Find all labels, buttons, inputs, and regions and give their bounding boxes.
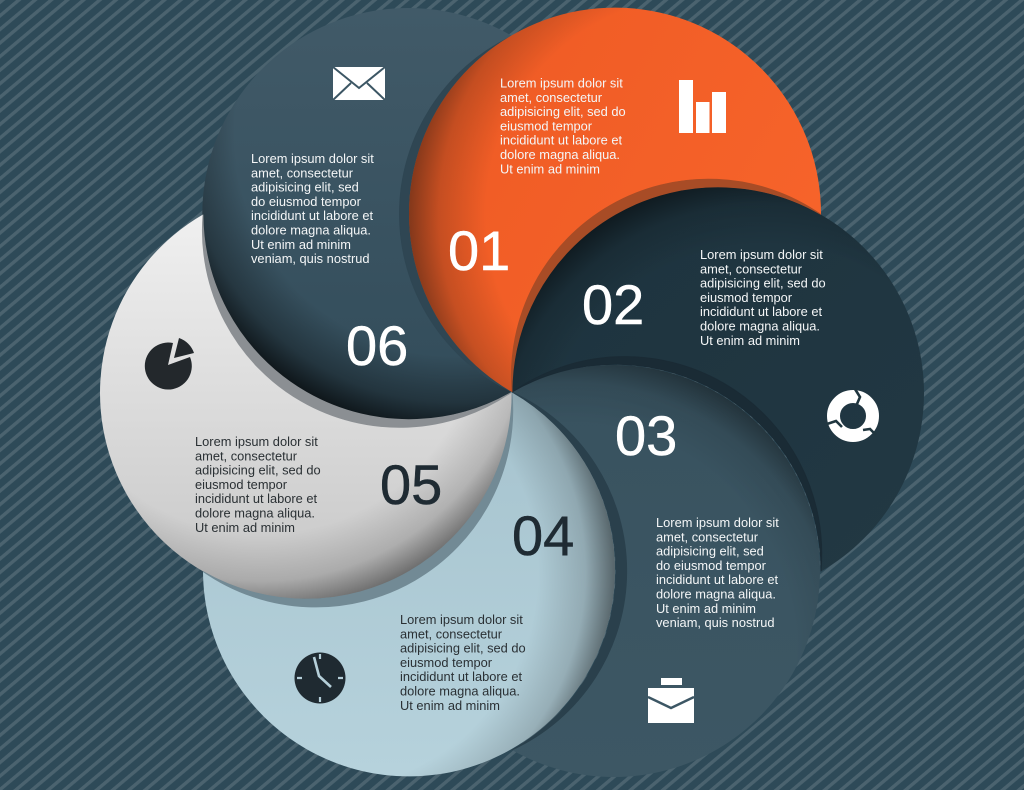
text block 04: adipisicing elit, sed do [400, 641, 526, 656]
text block 05: eiusmod tempor [195, 477, 288, 492]
text block 04: incididunt ut labore et [400, 669, 523, 684]
text block 05: Lorem ipsum dolor sit [195, 434, 318, 449]
text block 02: eiusmod tempor [700, 290, 793, 305]
number 05: 05 [380, 453, 442, 516]
text block 05: adipisicing elit, sed do [195, 463, 321, 478]
text block 04: Ut enim ad minim [400, 698, 500, 713]
text block 02: Lorem ipsum dolor sit [700, 247, 823, 262]
text block 04: dolore magna aliqua. [400, 684, 520, 698]
text block 03: incididunt ut labore et [656, 572, 779, 587]
text block 03: adipisicing elit, sed [656, 544, 764, 559]
panel: 06 [202, 8, 512, 420]
text block 05: Ut enim ad minim [195, 520, 295, 535]
text block 06: veniam, quis nostrud [251, 251, 370, 266]
text block 01: Lorem ipsum dolor sit [500, 76, 623, 90]
number 03: 03 [615, 404, 677, 467]
text block 04: eiusmod tempor [400, 655, 493, 670]
icon: bar chart [679, 80, 726, 133]
number 01: 01 [448, 219, 510, 282]
icon: cycle arrows [827, 389, 876, 436]
text block 04: amet, consectetur [400, 626, 503, 641]
number 04: 04 [512, 504, 574, 567]
text block 06: incididunt ut labore et [251, 208, 374, 223]
text block 03: amet, consectetur [656, 529, 759, 544]
text block 06: dolore magna aliqua. [251, 222, 371, 238]
text block 06: do eiusmod tempor [251, 194, 362, 209]
text block 05: amet, consectetur [195, 448, 298, 463]
text block 03: do eiusmod tempor [656, 558, 767, 573]
icon: pie chart [145, 338, 194, 390]
text block 02: dolore magna aliqua. [700, 318, 820, 334]
text block 04: Lorem ipsum dolor sit [400, 612, 523, 627]
panel: 01 [409, 8, 821, 392]
text block 01: eiusmod tempor [500, 118, 593, 133]
text block 05: incididunt ut labore et [195, 491, 318, 506]
panel: 02 [512, 187, 924, 571]
panel: 03 [512, 365, 820, 777]
icon: clock [294, 652, 346, 704]
number 02: 02 [582, 273, 644, 336]
text block 02: adipisicing elit, sed do [700, 276, 826, 291]
text block 02: amet, consectetur [700, 261, 803, 276]
text block 01: amet, consectetur [500, 90, 603, 105]
panel: 04 [203, 392, 615, 776]
text block 03: Ut enim ad minim [656, 601, 756, 616]
text block 02: Ut enim ad minim [700, 333, 800, 348]
text block 01: incididunt ut labore et [500, 133, 623, 148]
text block 03: veniam, quis nostrud [656, 615, 775, 630]
text block 03: Lorem ipsum dolor sit [656, 515, 779, 530]
text block 06: Ut enim ad minim [251, 237, 351, 252]
text block 05: dolore magna aliqua. [195, 506, 315, 520]
text block 01: dolore magna aliqua. [500, 147, 620, 162]
panel: 05 [100, 214, 512, 599]
text block 06: adipisicing elit, sed [251, 180, 359, 195]
text block 02: incididunt ut labore et [700, 304, 823, 319]
text block 06: Lorem ipsum dolor sit [251, 151, 374, 166]
icon: envelope [333, 67, 385, 100]
text block 03: dolore magna aliqua. [656, 586, 776, 602]
text block 01: Ut enim ad minim [500, 161, 600, 176]
number 06: 06 [346, 314, 408, 377]
text block 01: adipisicing elit, sed do [500, 104, 626, 119]
icon: briefcase [648, 678, 694, 723]
text block 06: amet, consectetur [251, 165, 354, 180]
